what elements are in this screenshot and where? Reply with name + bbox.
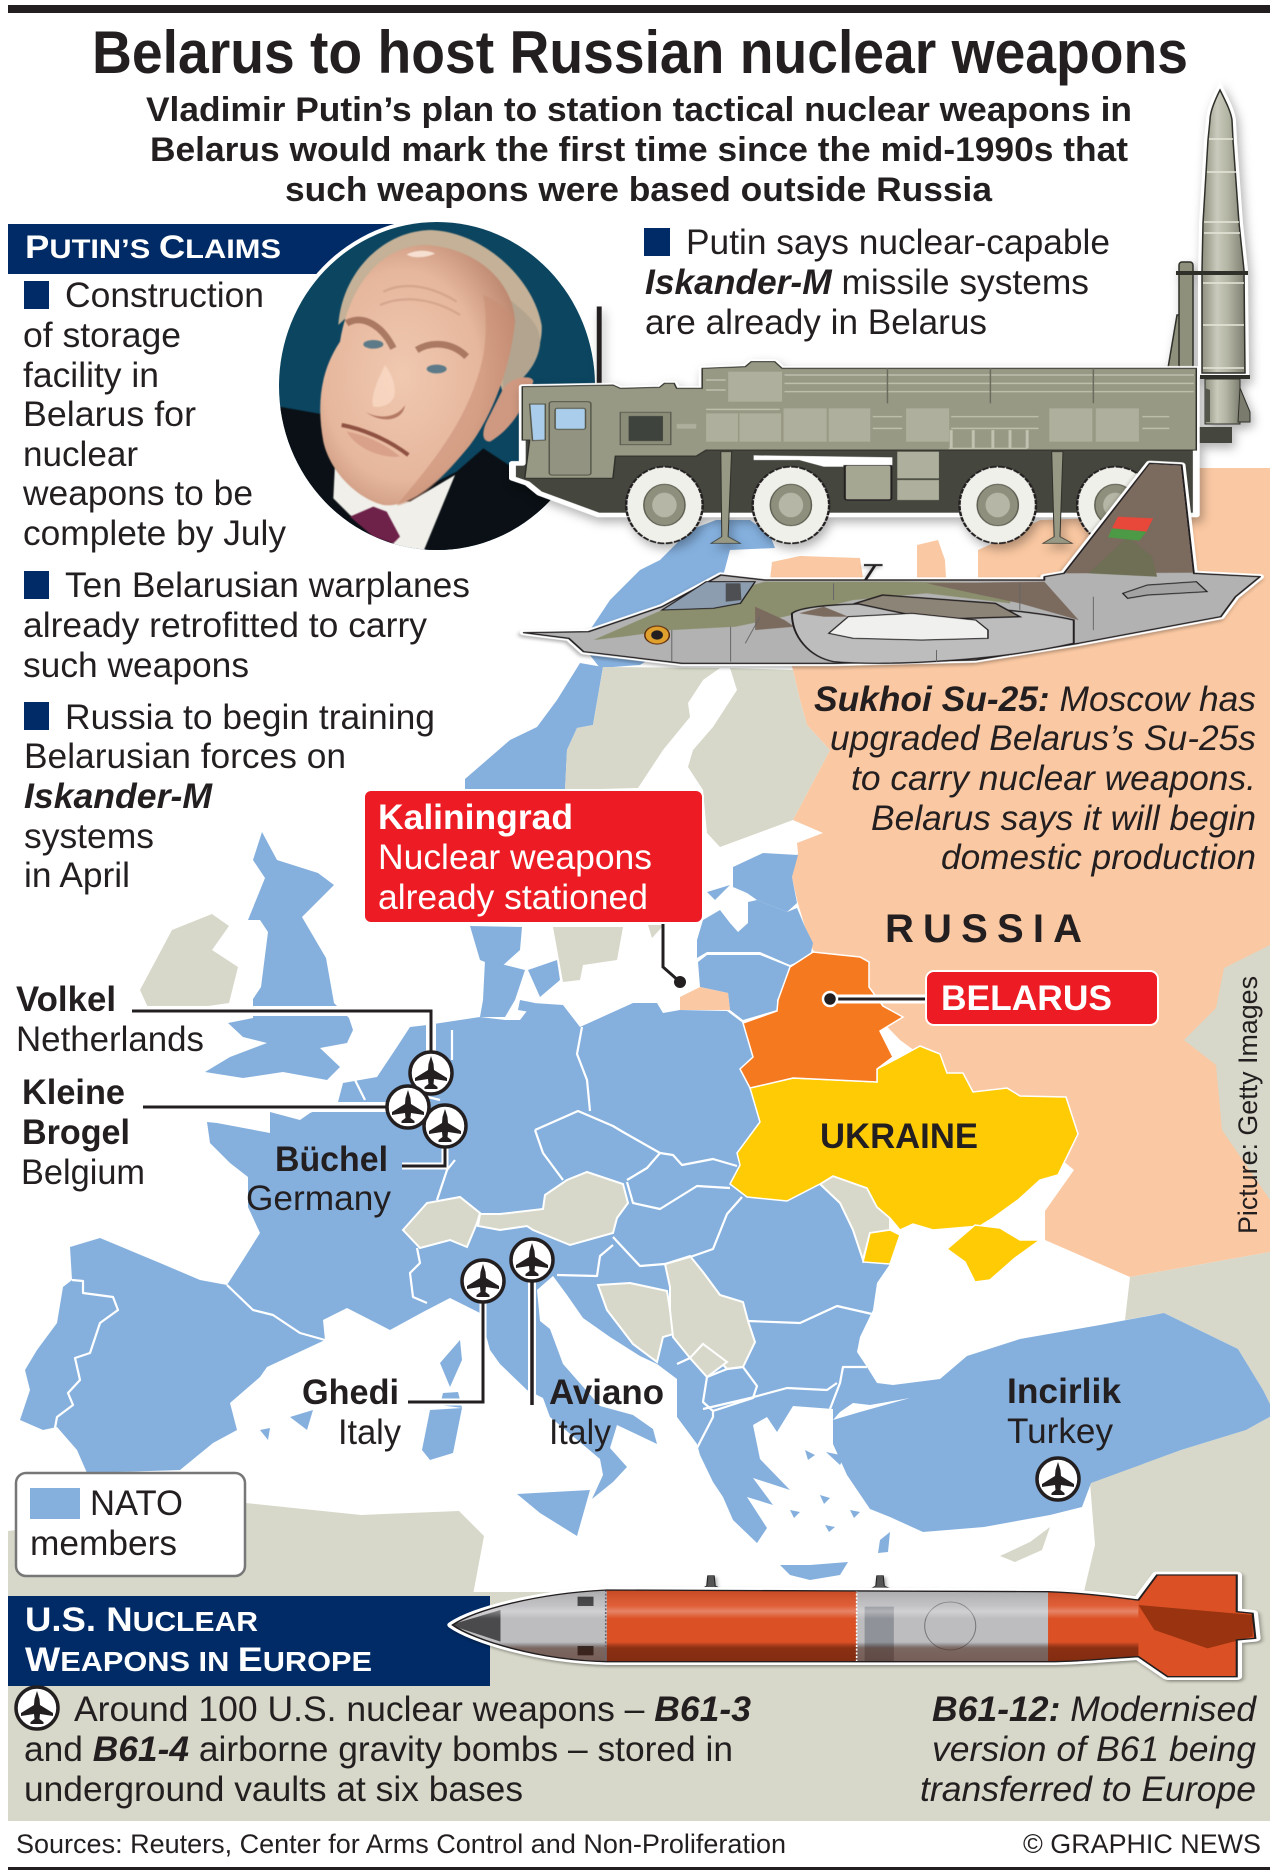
legend: NATO members (16, 1473, 245, 1576)
Belarus (740, 952, 903, 1088)
claim: warplanes retrofitted: such weapons (23, 646, 249, 685)
icon: Volkel jet (410, 1052, 452, 1094)
truck outline and chassis (512, 362, 1196, 515)
rear orange section (1048, 1576, 1254, 1676)
illustration: B61-12 bomb (447, 1572, 1264, 1683)
text: B61-12: transferred to Europe (920, 1770, 1256, 1809)
base: Ghedi: Ghedi (302, 1373, 399, 1412)
Caucasus and Middle East (1082, 1252, 1275, 1600)
text: B61-12: version of B61 being (932, 1730, 1257, 1769)
heading: Putin's claims: PUTIN’S CLAIMS (25, 229, 281, 265)
heading: U.S. nuclear: U.S. N UCLEAR (25, 1601, 258, 1639)
callout: Kaliningrad (364, 790, 703, 988)
camouflage (593, 582, 1015, 640)
panel: U.S. nuclear weapons in Europe (8, 1592, 1270, 1821)
callout: Belarus: BELARUS (941, 979, 1112, 1018)
base: Volkel: Volkel (16, 980, 116, 1019)
Norway south (465, 663, 603, 790)
Estonia (733, 853, 798, 912)
Sweden south (553, 927, 623, 982)
Sweden (565, 667, 720, 790)
claim: construction of storage facility: Construction (65, 276, 264, 315)
Sea of Marmara (833, 1398, 910, 1420)
claim: training on Iskander-M (24, 698, 435, 895)
engine pod (792, 604, 1074, 663)
callout: Kaliningrad: Kaliningrad (378, 798, 573, 837)
photo: Vladimir Putin (279, 222, 595, 550)
callout: Kaliningrad: Nuclear weapons (378, 838, 652, 877)
Iskander-M claim: Putin says nuclear-capable (686, 223, 1110, 262)
Su-25 caption: upgraded Belarus’s Su-25s (830, 719, 1256, 758)
Russia (770, 468, 1270, 1277)
claim: construction of storage facility: complete by July (23, 514, 287, 553)
ladder (951, 430, 1027, 448)
antenna (597, 307, 602, 407)
flag of Belarus (1108, 517, 1153, 541)
sources: Sources: Reuters, Center for Arms Control and Non-Proliferation (16, 1829, 786, 1859)
cab windows and door (549, 402, 591, 475)
base: Büchel: Büchel (275, 1140, 388, 1179)
text: weapons stored: Around 100 U.S. nuclear weapons – B61-3 (74, 1690, 752, 1729)
claim: construction of storage facility (22, 276, 287, 553)
fuselage outline (524, 463, 1260, 663)
base: Kleine Brogel (21, 1073, 390, 1192)
title: Belarus to host Russian nuclear weapons (92, 19, 1188, 86)
antenna (864, 565, 883, 580)
claim: training on Iskander-M: in April (24, 856, 130, 895)
missile (1168, 90, 1250, 443)
Balkan non-members (598, 1176, 890, 1377)
Latvia (697, 900, 813, 965)
text: weapons stored: and B61-4 airborne gravity bombs – stored in (24, 1730, 733, 1769)
subtitle: Vladimir Putin’s plan to station tactical nuclear weapons in (146, 91, 1132, 129)
text: weapons stored: underground vaults at six bases (24, 1770, 523, 1809)
Switzerland and Austria (403, 1172, 628, 1248)
nose (458, 1590, 607, 1661)
panel: Putin's claims header (8, 224, 408, 274)
base: Incirlik: Turkey (1007, 1412, 1113, 1451)
claim: warplanes retrofitted: Ten Belarusian warplanes (65, 566, 470, 605)
base: Volkel: Netherlands (16, 1020, 204, 1059)
label: Russia: RUSSIA (885, 907, 1082, 951)
Ukraine (730, 1046, 1078, 1282)
intake (829, 613, 988, 640)
icon: Kleine Brogel jet (387, 1086, 429, 1128)
callout: Kaliningrad: already stationed (378, 878, 648, 917)
icon: Ghedi jet (462, 1260, 504, 1302)
label: Ukraine: UKRAINE (820, 1117, 978, 1156)
country borders (55, 1027, 872, 1448)
nose art eye (645, 626, 669, 644)
base: Incirlik (1007, 1372, 1122, 1451)
top rule (8, 5, 1270, 13)
subtitle: such weapons were based outside Russia (285, 171, 993, 209)
base: Incirlik: Incirlik (1007, 1372, 1122, 1411)
Ireland (140, 914, 238, 1012)
launch rail (1168, 315, 1182, 368)
claim: warplanes retrofitted (23, 566, 470, 685)
base: Büchel: Germany (246, 1179, 391, 1218)
Gotland (648, 925, 662, 938)
Estonian islands (707, 885, 730, 900)
base: Kleine Brogel: Kleine (22, 1073, 125, 1112)
Finland (688, 668, 830, 847)
base: Ghedi: Italy (338, 1413, 401, 1452)
subtitle (146, 91, 1132, 209)
Su-25 caption (814, 680, 1256, 877)
North Africa (8, 1503, 484, 1600)
claim: construction of storage facility: nuclear (23, 435, 138, 474)
base: Aviano: Italy (549, 1413, 611, 1452)
stabiliser jacks (711, 452, 1072, 543)
bomb lugs (700, 1576, 892, 1589)
Iskander-M claim: Iskander-M missile systems (645, 263, 1089, 302)
Iskander-M claim: are already in Belarus (645, 303, 987, 342)
claim: construction of storage facility: Belarus for (23, 395, 196, 434)
map of Europe (8, 468, 1275, 1600)
NATO mainland (20, 1003, 1275, 1543)
Britain (205, 832, 353, 1080)
copyright: © GRAPHIC NEWS (1023, 1829, 1261, 1859)
icon: Aviano jet (511, 1239, 553, 1281)
credit: Picture: Getty Images (1233, 976, 1263, 1234)
subtitle: Belarus would mark the first time since the mid-1990s that (150, 131, 1128, 169)
wing (856, 595, 1020, 619)
tail stabiliser and rear nacelle (1123, 582, 1207, 598)
claim: construction of storage facility: facility in (23, 356, 159, 395)
illustration: Iskander-M launcher (512, 90, 1250, 543)
upper bay panels (706, 372, 1139, 500)
cab and body (522, 362, 1196, 478)
base: Büchel (246, 1140, 445, 1218)
Su-25 caption: to carry nuclear weapons. (851, 759, 1256, 798)
icon: Incirlik jet (1037, 1458, 1079, 1500)
fuel tank (845, 465, 891, 500)
legend: NATO members: NATO (90, 1484, 183, 1523)
Italian and Mediterranean islands (260, 1340, 890, 1580)
claim: training on Iskander-M: Iskander-M (24, 777, 213, 816)
legend: NATO members: members (30, 1524, 177, 1563)
claim: training on Iskander-M: Belarusian forces on (24, 737, 346, 776)
base: Aviano: Aviano (549, 1373, 664, 1412)
navy heading block (8, 1596, 490, 1686)
icon: jet (16, 1687, 58, 1729)
claim: construction of storage facility: weapons to be (22, 474, 253, 513)
claim: construction of storage facility: of storage (23, 316, 181, 355)
base: Aviano (532, 1282, 664, 1452)
Iskander-M claim (644, 223, 1110, 342)
claim: warplanes retrofitted: already retrofitted to carry (23, 606, 427, 645)
icon: base markers (387, 1052, 1079, 1500)
Kazakhstan (1184, 945, 1270, 1200)
canopy (662, 582, 755, 610)
base: Kleine Brogel: Brogel (22, 1113, 130, 1152)
shade band (442, 1589, 1138, 1663)
orange section (606, 1590, 857, 1661)
callout: Belarus (823, 971, 1158, 1025)
text: B61-12 (920, 1690, 1258, 1809)
Denmark (480, 960, 560, 1017)
text: weapons stored (24, 1690, 752, 1809)
bomb outline (453, 1575, 1255, 1677)
Kaliningrad (680, 987, 730, 1010)
base: Kleine Brogel: Belgium (21, 1153, 145, 1192)
Su-25 caption: Sukhoi Su-25: Moscow has (814, 680, 1256, 719)
Norway south tip (470, 926, 522, 968)
Norway north (578, 520, 775, 668)
bottom rule (8, 1867, 1270, 1870)
Lithuania (698, 955, 790, 1020)
Su-25 caption: Belarus says it will begin (871, 799, 1256, 838)
heading: weapons in Europe: WEAPONS IN EUROPE (25, 1641, 372, 1679)
icon: Büchel jet (424, 1105, 466, 1147)
claim: training on Iskander-M: Russia to begin training (65, 698, 435, 737)
Cyprus (1000, 1527, 1050, 1562)
tail fin camouflage (1065, 464, 1193, 573)
illustration: Sukhoi Su-25 (524, 463, 1260, 663)
chassis gap (754, 455, 892, 467)
wheels (626, 467, 1154, 543)
panel lines (672, 583, 1093, 662)
base: Volkel (16, 980, 431, 1059)
Su-25 caption: domestic production (941, 838, 1256, 877)
grey section (856, 1592, 1048, 1661)
claim: training on Iskander-M: systems (24, 817, 154, 856)
base: Ghedi (302, 1303, 483, 1452)
text: B61-12: B61-12: Modernised (932, 1690, 1258, 1729)
